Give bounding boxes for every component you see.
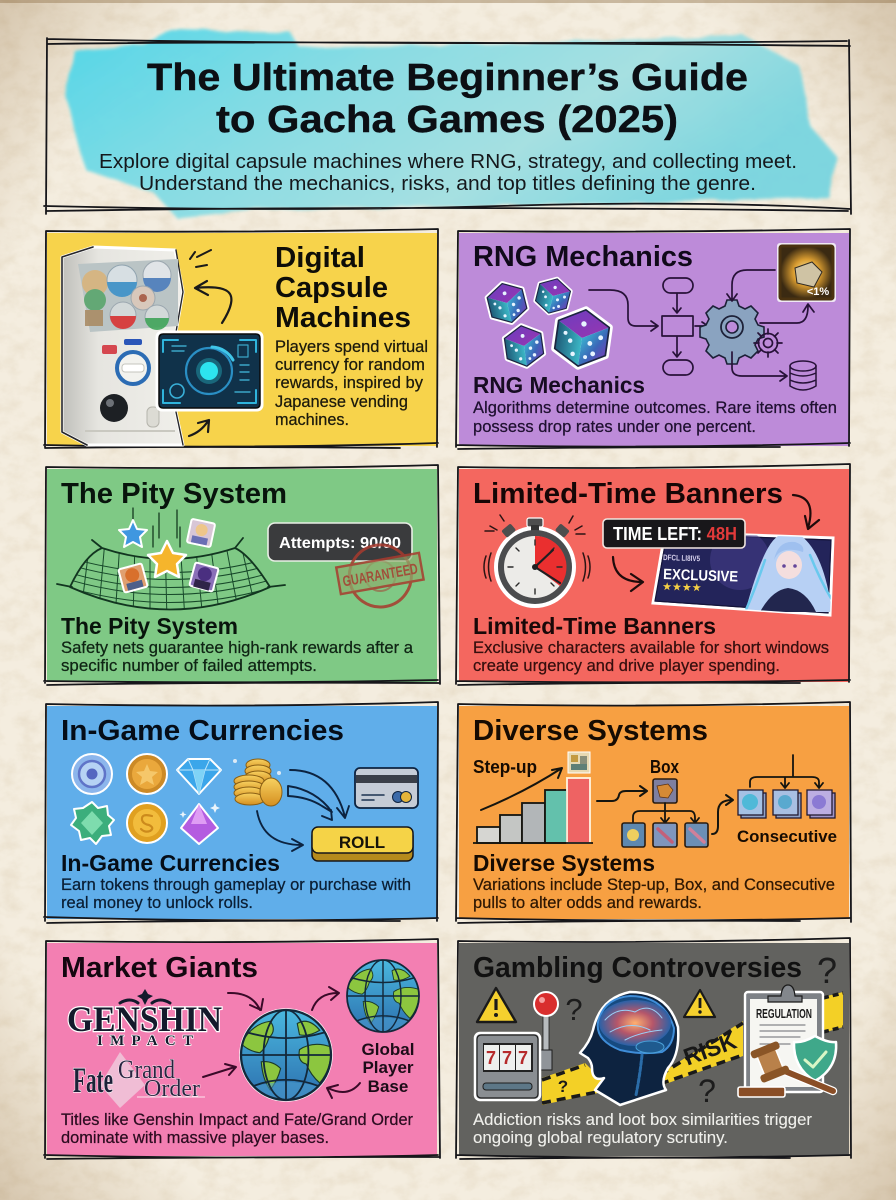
caution tape: [542, 992, 843, 1105]
heading: Gambling Controversies: [473, 952, 802, 984]
icon: rare item box: <1%: [807, 286, 829, 298]
icon: spark marks: [190, 250, 211, 267]
text block: dominate with massive player bases.: [61, 1128, 329, 1147]
icon: blue star: [119, 520, 147, 547]
text block: [473, 1110, 812, 1147]
icon: warning triangle right: [684, 990, 715, 1017]
panel: gambling controversies: [456, 938, 851, 1159]
heading: Digital: [275, 242, 365, 274]
attempts counter: [268, 523, 412, 561]
caution tape: RISK: [680, 1027, 741, 1071]
time left label: TIME LEFT: 48H: [613, 524, 737, 544]
subheading: Diverse Systems: [473, 850, 655, 876]
arrow: machine to screen: [195, 281, 231, 323]
icon: dice: [485, 275, 611, 370]
arrows: gear to box and database: [727, 270, 814, 381]
logo: Fate/Grand Order: Fate: [73, 1060, 113, 1100]
heading: In-Game Currencies: [61, 715, 344, 747]
icon: gold star: [148, 541, 186, 577]
heading: The Pity System: [61, 478, 287, 510]
label: box: Box: [650, 757, 679, 777]
arrow: step-up trend: [481, 768, 562, 810]
icon: slot machine: [475, 992, 558, 1100]
heading: Capsule: [275, 272, 388, 304]
icon: rare item box: [777, 243, 836, 302]
chart: step-up bars: [473, 778, 593, 843]
subheading: Limited-Time Banners: [473, 613, 716, 639]
icon: star coin: [127, 754, 167, 794]
icon: warning triangle left: [477, 988, 516, 1022]
text block: [61, 1110, 413, 1147]
arrow: to banner: [613, 557, 643, 591]
arrows: currency flows: [257, 770, 349, 851]
icon: digital screen: [157, 332, 262, 410]
cyan watercolor wash: [66, 30, 837, 218]
text block: possess drop rates under one percent.: [473, 417, 756, 436]
caution tape: ?: [558, 1077, 568, 1096]
text block: real money to unlock rolls.: [61, 893, 253, 912]
roll button: ROLL: [339, 833, 385, 852]
text block: [61, 638, 414, 675]
label: step-up: Step-up: [473, 757, 537, 777]
icon: question mark lower: ?: [698, 1073, 716, 1109]
icon: exclusive banner: ★★★★: [662, 581, 702, 594]
subtitle: Understand the mechanics, risks, and top titles defining the genre.: [139, 172, 756, 195]
icon: slot machine: 7: [518, 1048, 528, 1068]
text block: Variations include Step-up, Box, and Consecutive: [473, 875, 835, 894]
icon: brain head: [580, 992, 678, 1105]
label: global player base: Base: [368, 1077, 408, 1096]
text block: [275, 337, 428, 429]
icon: large globe: [239, 1008, 333, 1102]
text block: create urgency and drive player spending.: [473, 656, 780, 675]
attempts counter: Attempts: 90/90: [279, 535, 401, 552]
heading: Diverse Systems: [473, 715, 708, 747]
text block: Japanese vending: [275, 392, 408, 411]
stamp: guaranteed: [334, 538, 427, 614]
icon: credit card: [355, 768, 418, 808]
icon: consecutive cards: [738, 755, 835, 818]
icon: exclusive banner: EXCLUSIVE: [663, 566, 738, 586]
header panel: [44, 30, 851, 218]
icon: gavel: [738, 1041, 833, 1097]
logo: Genshin Impact: GENSHIN: [67, 999, 222, 1039]
icon: exclusive banner: [653, 530, 833, 615]
icon: question mark top: ?: [817, 950, 837, 991]
icon: slot machine: 7: [486, 1048, 496, 1068]
icon: exclusive banner: DFCL LI8IV5: [663, 553, 701, 563]
logo: Fate/Grand Order: [73, 1052, 205, 1108]
subtitle: [99, 150, 797, 195]
header frame: [44, 38, 851, 214]
text block: specific number of failed attempts.: [61, 656, 317, 675]
text block: Titles like Genshin Impact and Fate/Grand Order: [61, 1110, 413, 1129]
panel: in-game currencies: [44, 702, 438, 923]
icon: purple gem: [180, 803, 220, 844]
arrow: box to consecutive: [712, 795, 733, 834]
icon: stopwatch: [484, 515, 590, 608]
subheading: In-Game Currencies: [61, 850, 280, 876]
time left label: [603, 519, 745, 548]
title: to Gacha Games (2025): [216, 99, 678, 141]
text block: [473, 875, 835, 912]
label: global player base: Player: [362, 1058, 414, 1077]
icon: small globe: [347, 960, 419, 1032]
panel: pity system: [44, 465, 440, 685]
text block: [473, 398, 837, 436]
text block: Players spend virtual: [275, 337, 428, 356]
logo: Fate/Grand Order: Grand: [118, 1055, 175, 1084]
flowchart: [589, 278, 708, 375]
heading: Market Giants: [61, 952, 258, 984]
text block: currency for random: [275, 355, 425, 374]
panel: market giants: [44, 939, 440, 1159]
logo: Fate/Grand Order: Order: [144, 1076, 200, 1102]
text block: Safety nets guarantee high-rank rewards after a: [61, 638, 414, 657]
subheading: RNG Mechanics: [473, 372, 645, 398]
icon: shield: [794, 1036, 836, 1081]
label: global player base: [362, 1040, 414, 1096]
title: [147, 57, 748, 141]
text block: Addiction risks and loot box similarities trigger: [473, 1110, 812, 1129]
label: consecutive: Consecutive: [737, 827, 837, 846]
arrow: lower: [189, 420, 209, 436]
heading: [275, 242, 411, 334]
heading: Limited-Time Banners: [473, 478, 783, 510]
text block: Algorithms determine outcomes. Rare items often: [473, 398, 837, 417]
roll button: [312, 827, 413, 861]
logo: Genshin Impact: [67, 989, 222, 1049]
subtitle: Explore digital capsule machines where RNG, strategy, and collecting meet.: [99, 150, 797, 173]
text block: [473, 638, 829, 675]
heading: RNG Mechanics: [473, 241, 693, 273]
arrow: step-up to box: [597, 786, 647, 801]
stamp: guaranteed: GUARANTEED: [341, 560, 419, 590]
logo: Genshin Impact: IMPACT: [97, 1033, 193, 1049]
icon: green gem: [71, 802, 114, 844]
arrows: market flows: [203, 987, 360, 1098]
icon: gold coin: [127, 803, 167, 843]
icon: safety net: [57, 508, 285, 620]
icon: regulation clipboard: [745, 985, 823, 1092]
subheading: The Pity System: [61, 613, 238, 639]
heading: Machines: [275, 302, 411, 334]
text block: machines.: [275, 410, 349, 429]
icon: slot machine: 7: [502, 1048, 512, 1068]
label: global player base: Global: [362, 1040, 414, 1059]
arrow: banner top: [793, 495, 819, 529]
icon: regulation clipboard: REGULATION: [756, 1006, 812, 1021]
title: The Ultimate Beginner’s Guide: [147, 57, 748, 99]
panel: digital capsule machines: [44, 229, 438, 448]
icon: blue token: [72, 754, 112, 794]
icon: small gear: [754, 329, 782, 357]
icon: box tree: [622, 779, 708, 847]
icon: database: [790, 361, 816, 390]
icon: diamond: [177, 759, 221, 794]
text block: pulls to alter odds and rewards.: [473, 893, 702, 912]
text block: Earn tokens through gameplay or purchase with: [61, 875, 411, 894]
icon: reward thumbnail: [568, 752, 590, 773]
panel: diverse systems: [456, 702, 851, 923]
icon: large gear: [700, 300, 764, 364]
text block: rewards, inspired by: [275, 373, 423, 392]
icon: question mark mid: ?: [565, 992, 583, 1027]
panel: limited-time banners: [456, 464, 850, 685]
icon: character cards: [118, 519, 219, 593]
panel: RNG mechanics: [456, 229, 850, 449]
icon: capsule machine: [62, 247, 183, 445]
text block: [61, 875, 411, 912]
icon: coin pile: [233, 759, 282, 806]
text block: ongoing global regulatory scrutiny.: [473, 1128, 728, 1147]
text block: Exclusive characters available for short windows: [473, 638, 829, 657]
